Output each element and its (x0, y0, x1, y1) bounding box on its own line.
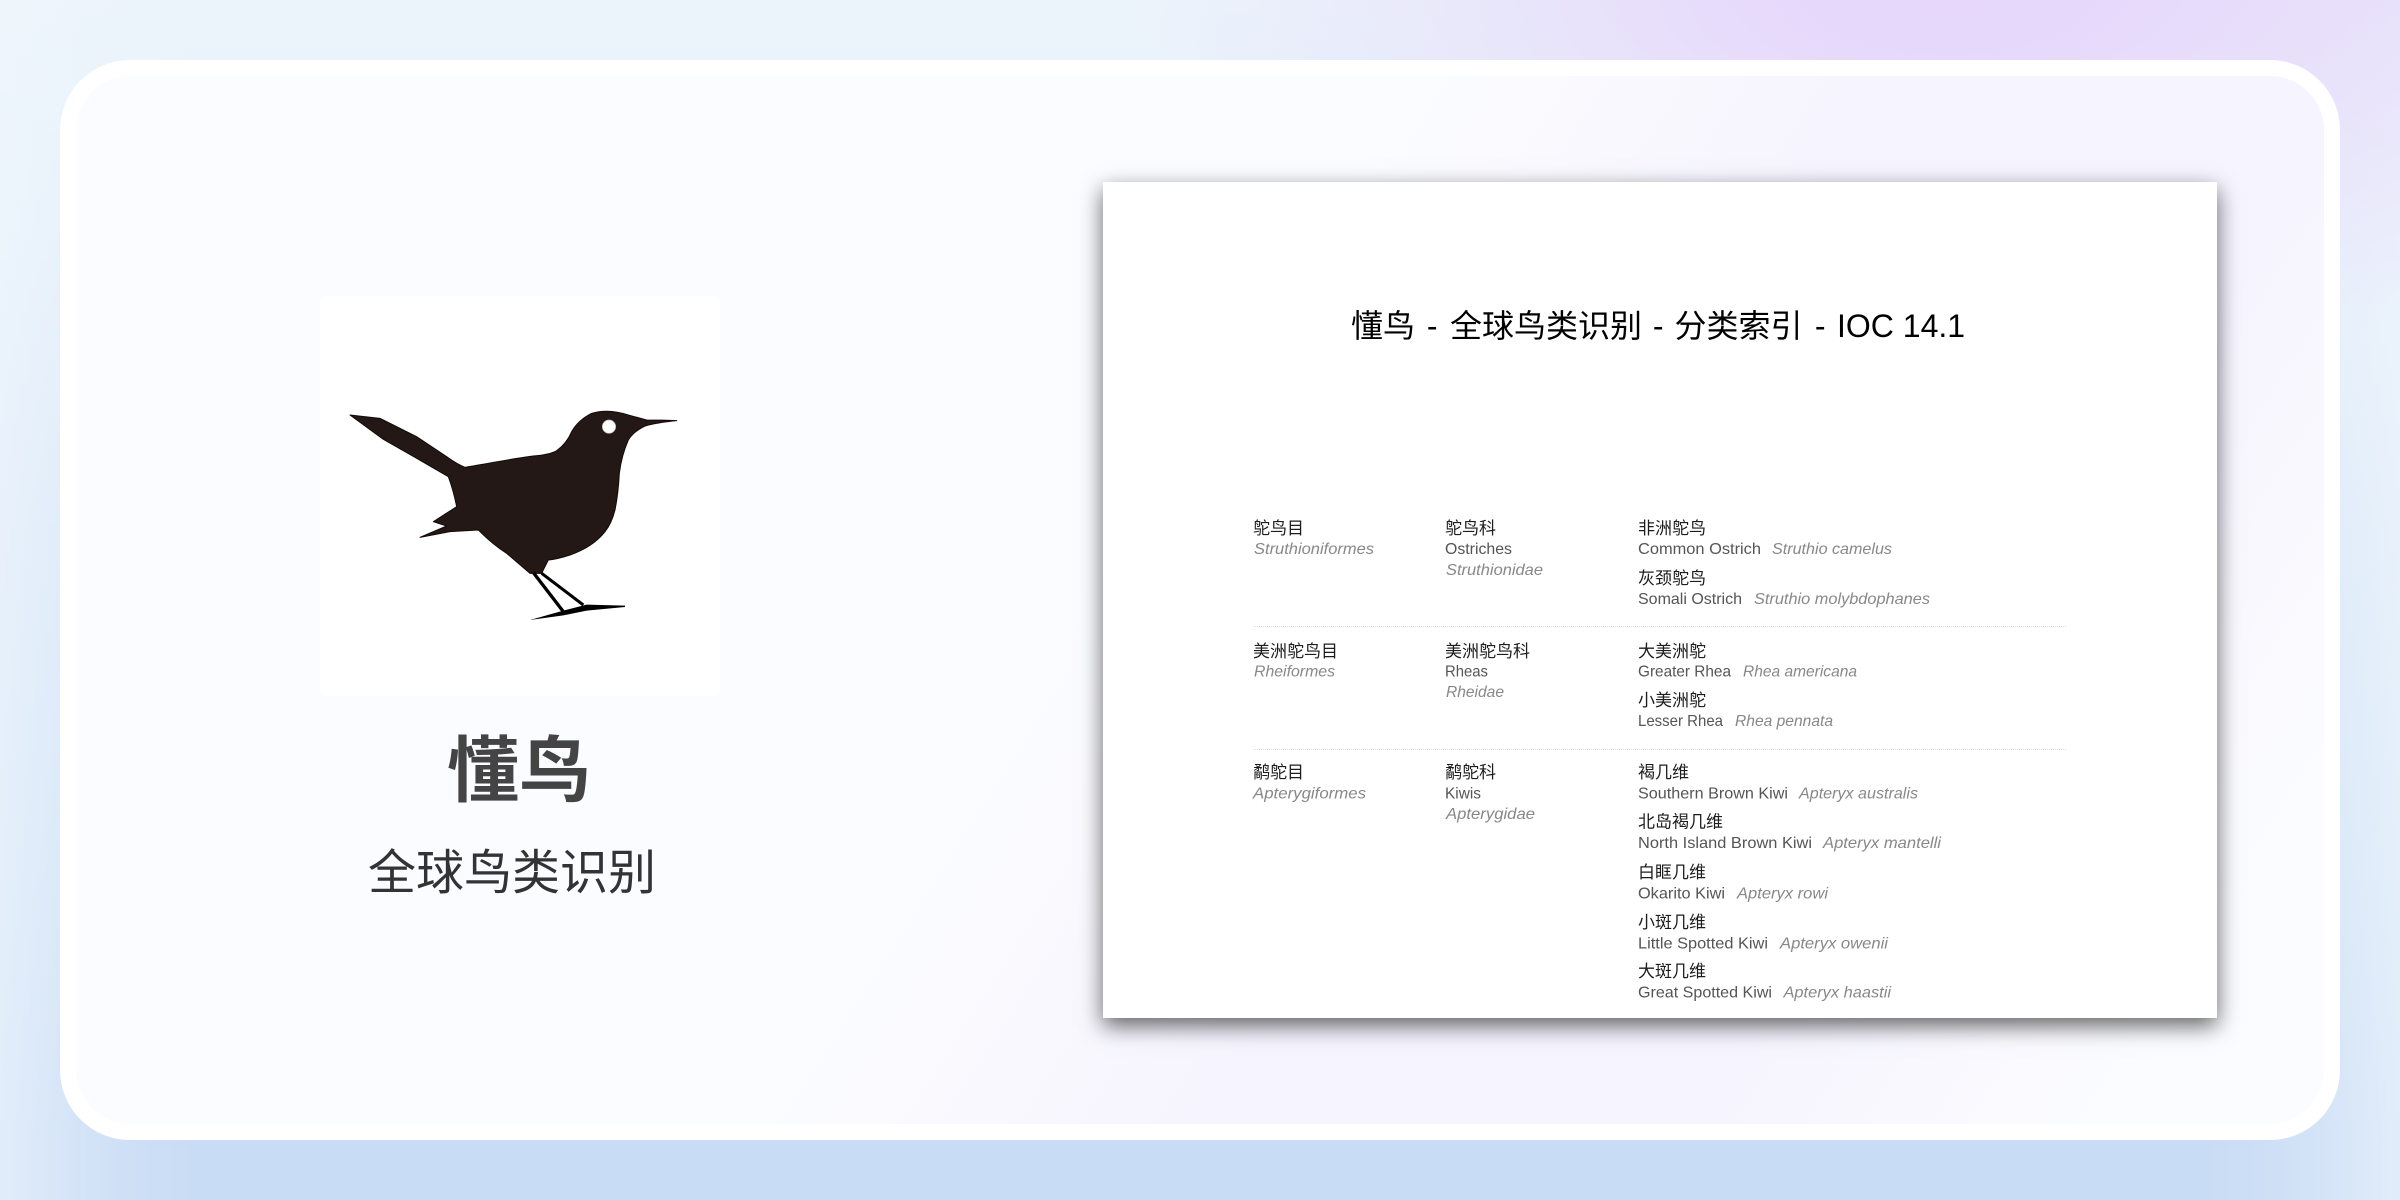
species list: 小斑几维 (1638, 913, 1706, 932)
species list: 非洲鸵鸟 (1638, 519, 1706, 538)
species list (1638, 519, 1930, 608)
species list: 北岛褐几维 (1638, 812, 1723, 832)
family: 鹬鸵科 (1445, 763, 1496, 782)
species list: 小美洲鸵 (1638, 691, 1706, 710)
species list: Lesser Rhea (1638, 713, 1723, 730)
order: Rheiformes (1254, 664, 1335, 680)
document title: IOC 14.1 (1837, 308, 1965, 344)
species list: Apteryx owenii (1779, 936, 1888, 952)
order: 美洲鸵鸟目 (1253, 642, 1338, 661)
species list: Little Spotted Kiwi (1638, 936, 1768, 952)
family: 美洲鸵鸟科 (1445, 642, 1530, 661)
order: Struthioniformes (1254, 541, 1374, 558)
order (1253, 519, 1374, 558)
family: Apterygidae (1445, 806, 1535, 823)
document title: 全球鸟类识别 (1450, 308, 1642, 344)
species list: North Island Brown Kiwi (1638, 835, 1812, 852)
row: kiwis (1252, 763, 1941, 1002)
species list: Apteryx rowi (1736, 886, 1828, 902)
family: Kiwis (1445, 786, 1481, 802)
species list: Apteryx mantelli (1822, 835, 1941, 852)
panel: taxonomy document (1103, 182, 2217, 1018)
family: Struthionidae (1446, 562, 1543, 579)
icon: bird silhouette (350, 410, 678, 620)
family (1445, 519, 1543, 579)
species list: Rhea americana (1743, 664, 1857, 680)
order: Apterygiformes (1252, 786, 1366, 802)
order: 鹬鸵目 (1253, 763, 1304, 782)
species list: 白眶几维 (1638, 863, 1706, 882)
species list: Struthio molybdophanes (1754, 591, 1930, 608)
family (1445, 642, 1530, 701)
species list: Southern Brown Kiwi (1638, 786, 1788, 802)
species list: Apteryx haastii (1782, 984, 1891, 1002)
document title: - (1806, 308, 1834, 344)
order (1253, 642, 1338, 680)
order: 鸵鸟目 (1253, 519, 1304, 538)
species list: 大斑几维 (1638, 962, 1706, 981)
heading: brand name: 懂鸟 (447, 732, 591, 812)
species list: Great Spotted Kiwi (1638, 984, 1772, 1002)
family: 鸵鸟科 (1445, 519, 1496, 538)
family: Ostriches (1445, 541, 1512, 558)
species list: 褐几维 (1638, 763, 1689, 782)
species list: Struthio camelus (1772, 541, 1892, 558)
species list: Greater Rhea (1638, 664, 1731, 680)
species list (1638, 642, 1857, 730)
species list: Somali Ostrich (1638, 591, 1742, 608)
family: Rheidae (1446, 684, 1504, 701)
row: rheas (1253, 642, 1857, 730)
species list: Common Ostrich (1638, 541, 1761, 558)
text: brand subtitle: 全球鸟类识别 (368, 847, 656, 900)
document title: - (1644, 308, 1672, 344)
order (1252, 763, 1366, 802)
family: Rheas (1445, 664, 1488, 680)
row: ostriches (1253, 519, 1930, 608)
species list: Okarito Kiwi (1638, 886, 1725, 902)
species list: Apteryx australis (1798, 786, 1918, 802)
family (1445, 763, 1535, 823)
species list: 灰颈鸵鸟 (1638, 569, 1706, 588)
species list: Rhea pennata (1735, 713, 1833, 730)
species list: 大美洲鸵 (1638, 642, 1706, 661)
species list (1638, 763, 1941, 1002)
panel: logo tile with bird icon (320, 296, 720, 696)
document title: 懂鸟 (1351, 308, 1415, 344)
document title: 分类索引 (1674, 308, 1803, 344)
document title: - (1418, 308, 1446, 344)
